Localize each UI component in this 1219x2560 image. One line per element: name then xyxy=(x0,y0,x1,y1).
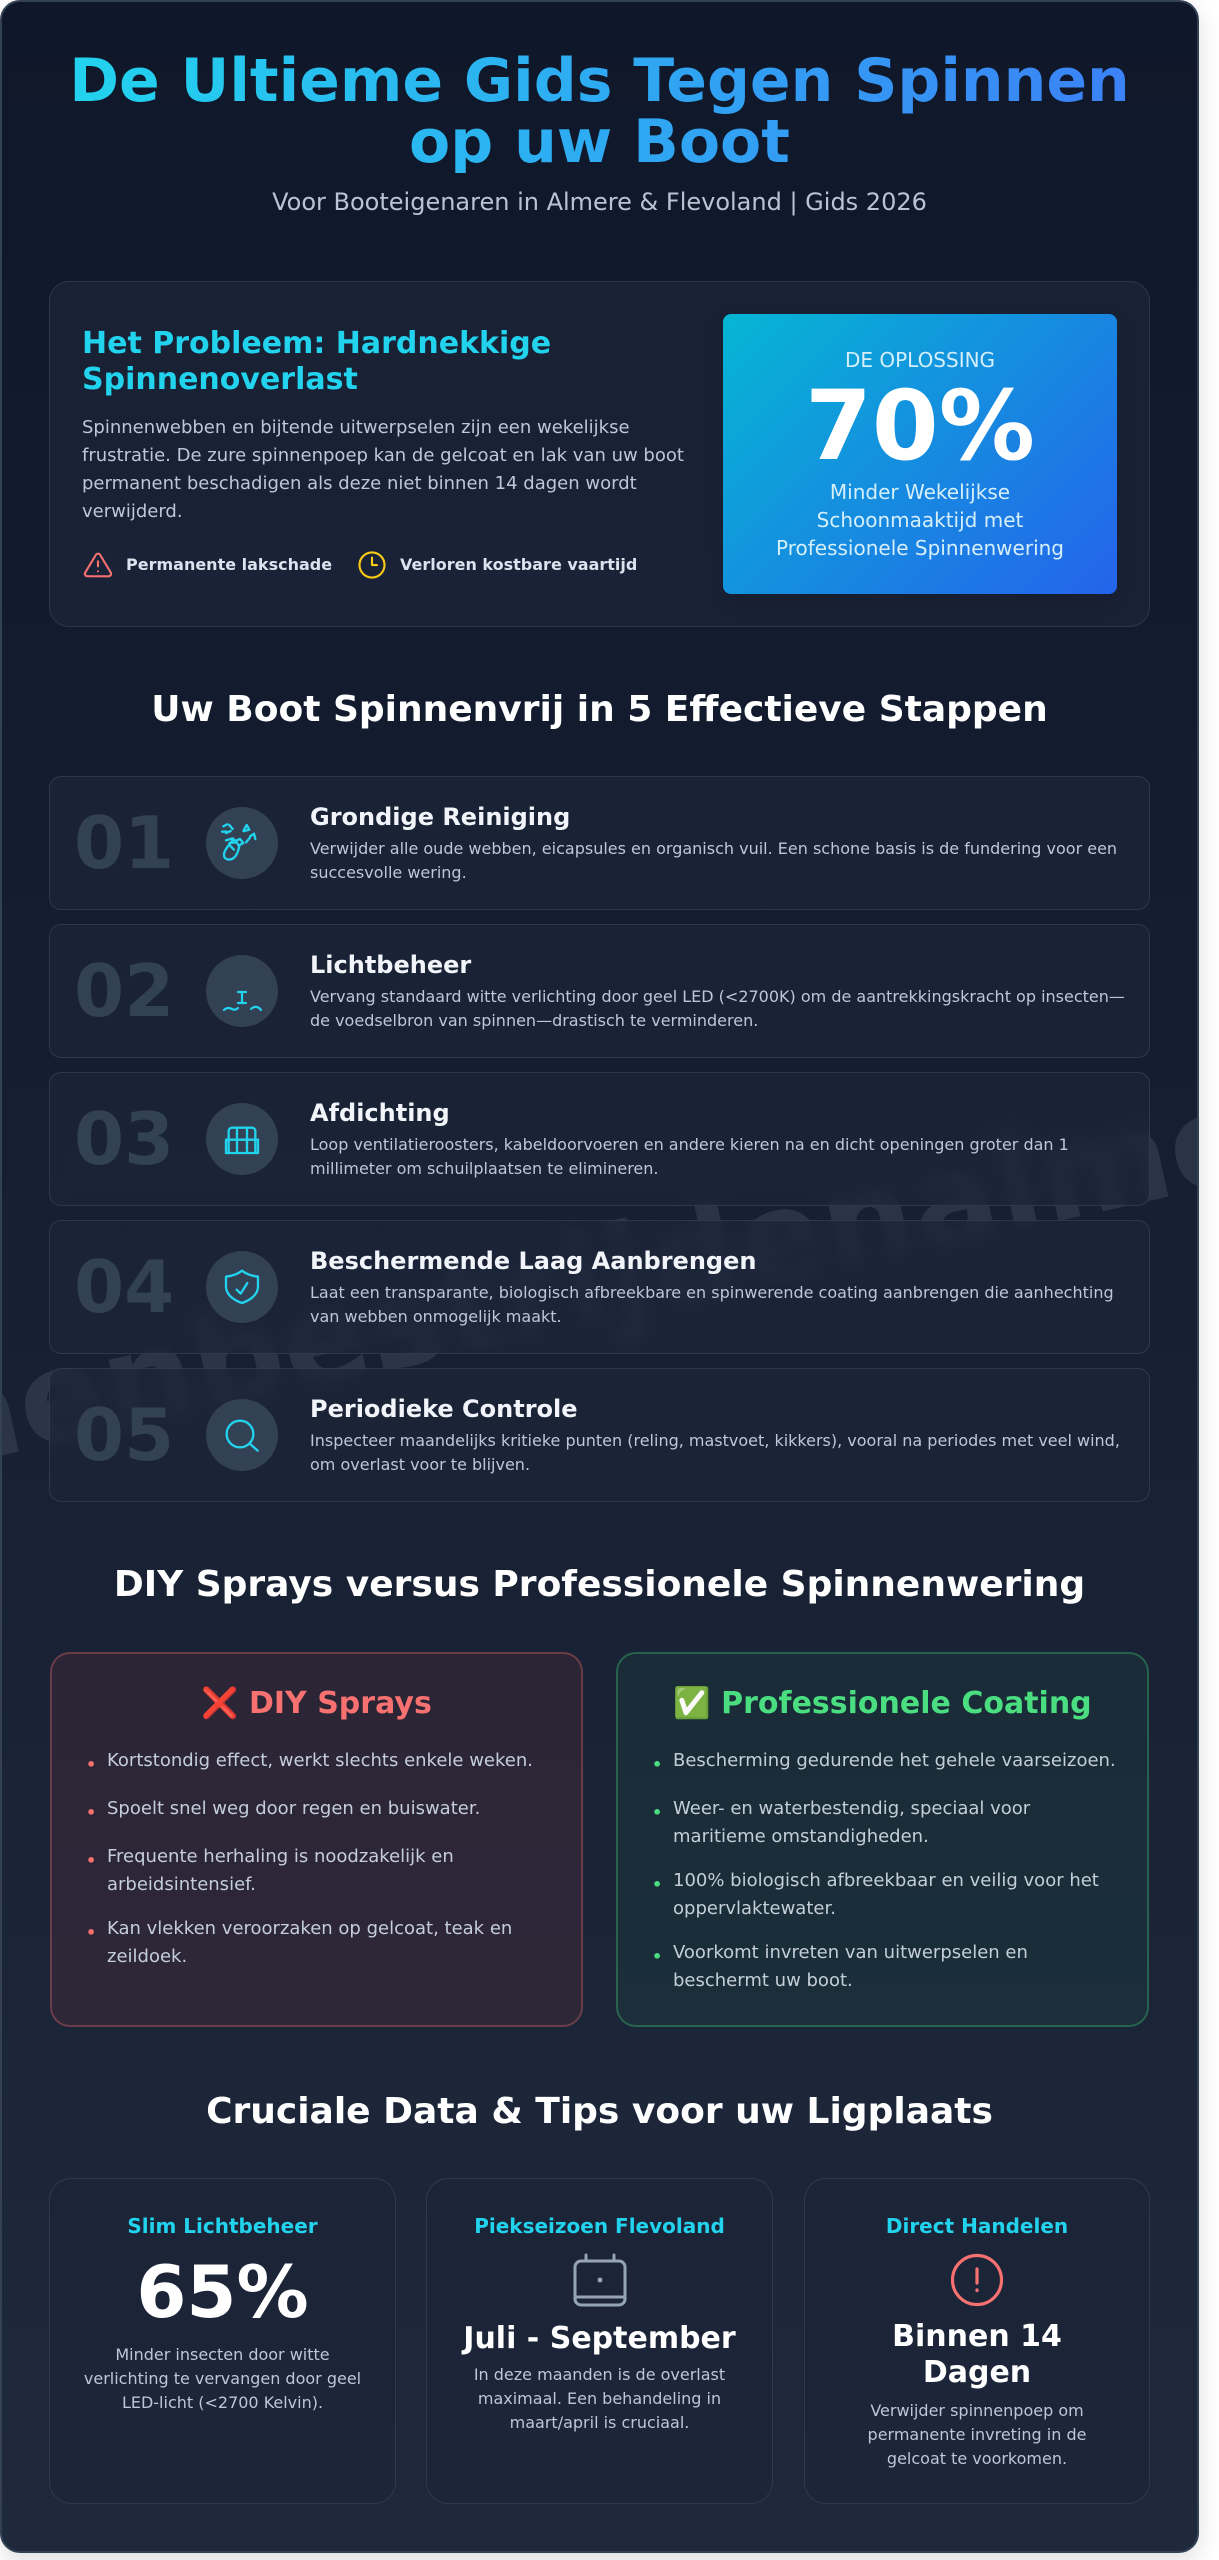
list item: zeildoek. xyxy=(107,1946,187,1967)
card text xyxy=(84,2345,361,2412)
number: 03 xyxy=(74,1097,174,1181)
list item: Kan vlekken veroorzaken op gelcoat, teak en xyxy=(107,1918,512,1939)
step text: Loop ventilatieroosters, kabeldoorvoeren en andere kieren na en dicht openingen groter dan 1 xyxy=(310,1135,1069,1154)
panel: professional coating: • xyxy=(652,1803,662,1822)
step 5 xyxy=(49,1368,1150,1502)
number: 01 xyxy=(74,801,174,885)
heading: steps: Uw Boot Spinnenvrij in 5 Effectieve Stappen xyxy=(151,689,1048,730)
icon: warning triangle xyxy=(84,552,112,578)
step title: Afdichting xyxy=(310,1099,450,1127)
card title: Piekseizoen Flevoland xyxy=(474,2214,725,2238)
list item: oppervlaktewater. xyxy=(673,1898,836,1919)
problem heading xyxy=(82,326,551,397)
list item: Bescherming gedurende het gehele vaarseizoen. xyxy=(673,1750,1116,1771)
card: piekseizoen xyxy=(426,2178,773,2504)
card text: In deze maanden is de overlast xyxy=(474,2365,725,2384)
list item: Weer- en waterbestendig, speciaal voor xyxy=(673,1798,1030,1819)
card text xyxy=(474,2365,725,2432)
card text xyxy=(868,2401,1086,2468)
card text: Minder insecten door witte xyxy=(115,2345,330,2364)
step text: om overlast voor te blijven. xyxy=(310,1455,530,1474)
panel: professional coating: • xyxy=(652,1875,662,1894)
card text: Verwijder spinnenpoep om xyxy=(870,2401,1084,2420)
panel: DIY sprays: • xyxy=(86,1803,96,1822)
list item: 100% biologisch afbreekbaar en veilig voor het xyxy=(673,1870,1099,1891)
step text: Laat een transparante, biologisch afbreekbare en spinwerende coating aanbrengen die aanhechting xyxy=(310,1283,1114,1302)
panel: professional coating: • xyxy=(652,1755,662,1774)
icon: clock xyxy=(358,551,386,579)
panel: DIY sprays xyxy=(50,1652,583,2027)
card: slim lichtbeheer xyxy=(49,2178,396,2504)
icon: sealing xyxy=(206,1103,278,1175)
list item xyxy=(652,1942,1028,1991)
icon: shield xyxy=(206,1251,278,1323)
list item: maritieme omstandigheden. xyxy=(673,1826,929,1847)
problem heading: Spinnenoverlast xyxy=(82,362,358,397)
icon: cleaning xyxy=(206,807,278,879)
card text: maximaal. Een behandeling in xyxy=(478,2389,721,2408)
card headline: Dagen xyxy=(923,2355,1031,2390)
icon: light xyxy=(206,955,278,1027)
step title: Grondige Reiniging xyxy=(310,803,570,831)
problem text: verwijderd. xyxy=(82,501,183,522)
number: 02 xyxy=(74,949,174,1033)
professional heading: ✅ Professionele Coating xyxy=(673,1686,1092,1721)
tag: vaartijd: Verloren kostbare vaartijd xyxy=(400,555,637,574)
card headline: Juli - September xyxy=(463,2321,736,2356)
step text: Inspecteer maandelijks kritieke punten (reling, mastvoet, kikkers), vooral na periodes met veel wind, xyxy=(310,1431,1120,1450)
problem text xyxy=(82,417,684,522)
step text xyxy=(310,987,1125,1030)
icon: calendar xyxy=(574,2254,626,2306)
solution box xyxy=(723,314,1117,594)
list item: Frequente herhaling is noodzakelijk en xyxy=(107,1846,454,1867)
solution text xyxy=(776,480,1064,560)
step 2 xyxy=(49,924,1150,1058)
step text xyxy=(310,839,1117,882)
card headline xyxy=(892,2319,1062,2390)
list item: arbeidsintensief. xyxy=(107,1874,256,1895)
solution text: Minder Wekelijkse xyxy=(830,480,1010,504)
problem text: permanent beschadigen als deze niet binnen 14 dagen wordt xyxy=(82,473,637,494)
card title: Slim Lichtbeheer xyxy=(127,2214,318,2238)
card text: gelcoat te voorkomen. xyxy=(887,2449,1067,2468)
solution label: DE OPLOSSING xyxy=(845,348,995,372)
step 3 xyxy=(49,1072,1150,1206)
panel: DIY sprays: • xyxy=(86,1851,96,1870)
panel: DIY sprays: • xyxy=(86,1923,96,1942)
icon: alert xyxy=(950,2254,1004,2306)
title: De Ultieme Gids Tegen Spinnen xyxy=(69,46,1130,116)
panel: professional coating: • xyxy=(652,1947,662,1966)
icon: search xyxy=(206,1399,278,1471)
list item: Voorkomt invreten van uitwerpselen en xyxy=(673,1942,1028,1963)
number: 04 xyxy=(74,1245,174,1329)
panel: problem xyxy=(49,281,1150,627)
problem text: Spinnenwebben en bijtende uitwerpselen zijn een wekelijkse xyxy=(82,417,630,438)
solution text: Schoonmaaktijd met xyxy=(817,508,1023,532)
solution text: Professionele Spinnenwering xyxy=(776,536,1064,560)
number: 05 xyxy=(74,1393,174,1477)
subtitle: Voor Booteigenaren in Almere & Flevoland | Gids 2026 xyxy=(272,188,927,216)
problem text: frustratie. De zure spinnenpoep kan de gelcoat en lak van uw boot xyxy=(82,445,684,466)
step text: succesvolle wering. xyxy=(310,863,467,882)
step text: van webben onmogelijk maakt. xyxy=(310,1307,562,1326)
list item: beschermt uw boot. xyxy=(673,1970,853,1991)
card text: permanente invreting in de xyxy=(868,2425,1086,2444)
step text xyxy=(310,1283,1114,1326)
solution stat: 70% xyxy=(805,370,1035,482)
list item xyxy=(652,1798,1030,1847)
step 4 xyxy=(49,1220,1150,1354)
step text: Verwijder alle oude webben, eicapsules en organisch vuil. Een schone basis is de fundering voor een xyxy=(310,839,1117,858)
list item xyxy=(86,1846,454,1895)
step text: millimeter om schuilplaatsen te elimineren. xyxy=(310,1159,658,1178)
step title: Periodieke Controle xyxy=(310,1395,578,1423)
card text: verlichting te vervangen door geel xyxy=(84,2369,361,2388)
card headline: Binnen 14 xyxy=(892,2319,1062,2354)
panel: DIY sprays: • xyxy=(86,1755,96,1774)
step title: Beschermende Laag Aanbrengen xyxy=(310,1247,756,1275)
step text xyxy=(310,1431,1120,1474)
step text xyxy=(310,1135,1069,1178)
heading: data: Cruciale Data & Tips voor uw Ligplaats xyxy=(206,2091,993,2132)
step text: Vervang standaard witte verlichting door geel LED (<2700K) om de aantrekkingskracht op insecten— xyxy=(310,987,1125,1006)
list item: Spoelt snel weg door regen en buiswater. xyxy=(107,1798,480,1819)
heading: comparison: DIY Sprays versus Professionele Spinnenwering xyxy=(114,1564,1085,1605)
list item xyxy=(86,1918,512,1967)
card title: Direct Handelen xyxy=(886,2214,1068,2238)
panel: professional coating xyxy=(616,1652,1149,2027)
step text: de voedselbron van spinnen—drastisch te verminderen. xyxy=(310,1011,758,1030)
title: op uw Boot xyxy=(409,107,790,177)
list item xyxy=(652,1870,1099,1919)
card stat: 65% xyxy=(136,2250,309,2334)
list item: Kortstondig effect, werkt slechts enkele weken. xyxy=(107,1750,533,1771)
title xyxy=(69,51,1130,173)
step 1 xyxy=(49,776,1150,910)
tag: lakschade: Permanente lakschade xyxy=(126,555,332,574)
card text: maart/april is cruciaal. xyxy=(510,2413,689,2432)
problem heading: Het Probleem: Hardnekkige xyxy=(82,326,551,361)
DIY heading: ❌ DIY Sprays xyxy=(201,1686,432,1721)
card text: LED-licht (<2700 Kelvin). xyxy=(122,2393,323,2412)
card: direct handelen xyxy=(804,2178,1150,2504)
step title: Lichtbeheer xyxy=(310,951,471,979)
